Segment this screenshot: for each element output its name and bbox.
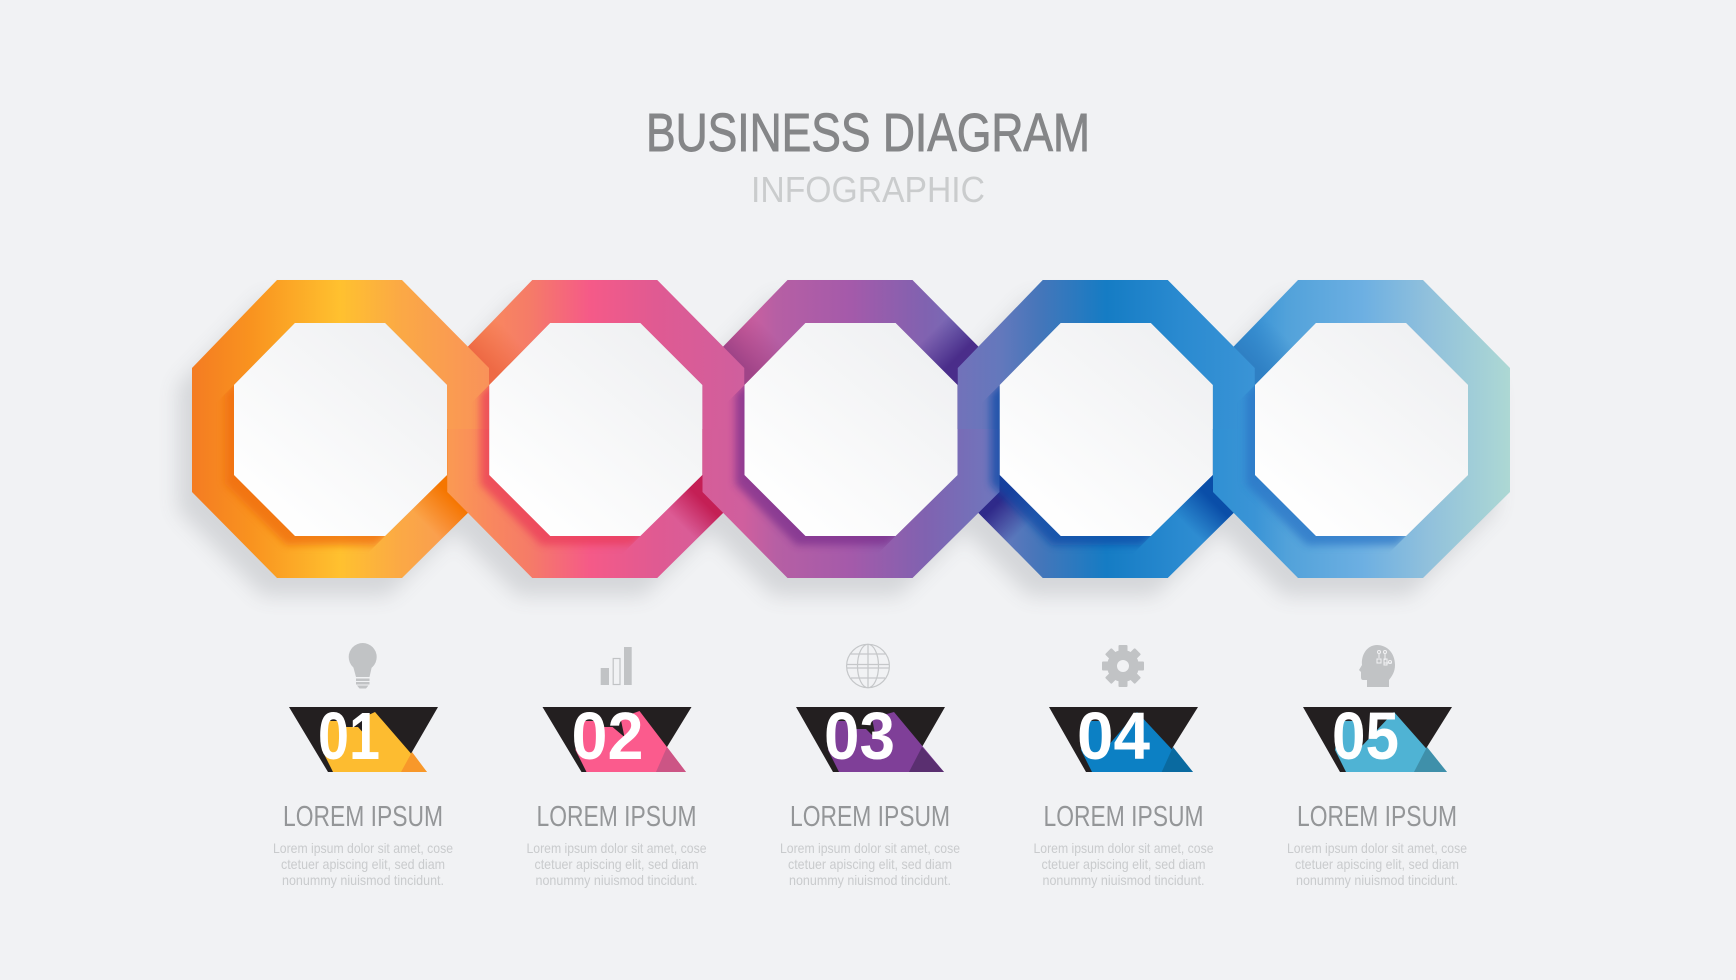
body text 4: nonummy niuismod tincidunt. [1042, 872, 1204, 888]
octagon chain diagram [178, 280, 1510, 596]
white octagon 3 [744, 323, 958, 536]
icon: light bulb [349, 643, 377, 688]
body text 1: Lorem ipsum dolor sit amet, cose [273, 840, 453, 856]
subtitle: INFOGRAPHIC [751, 169, 985, 210]
icon: bar chart [601, 647, 632, 685]
upper half of rings [192, 280, 1510, 430]
body text 2: nonummy niuismod tincidunt. [536, 872, 698, 888]
body text 3 [780, 840, 960, 888]
body text 5: ctetuer apiscing elit, sed diam [1295, 856, 1459, 872]
white octagon 1 [234, 323, 447, 536]
badge 02 [542, 699, 692, 774]
heading 2: LOREM IPSUM [536, 801, 696, 833]
body text 5 [1287, 840, 1467, 888]
body text 3: ctetuer apiscing elit, sed diam [788, 856, 952, 872]
column 4 [1034, 645, 1214, 888]
badge 05 [1303, 699, 1452, 774]
title: BUSINESS DIAGRAM [646, 103, 1090, 163]
badge 01 [289, 699, 438, 774]
body text 3: Lorem ipsum dolor sit amet, cose [780, 840, 960, 856]
lower half of rings [192, 429, 1510, 578]
drop shadow of the chain [178, 298, 1496, 596]
body text 5: Lorem ipsum dolor sit amet, cose [1287, 840, 1467, 856]
column 3 [780, 644, 960, 888]
badge 03 [796, 699, 945, 774]
badge 04: 04 [1077, 699, 1150, 774]
badge 03: 03 [824, 699, 895, 774]
body text 4: ctetuer apiscing elit, sed diam [1042, 856, 1206, 872]
icon: head with circuit [1359, 645, 1395, 687]
body text 2: ctetuer apiscing elit, sed diam [534, 856, 698, 872]
column 1 [273, 643, 453, 888]
inner shadows around the holes [224, 385, 1406, 549]
body text 1 [273, 840, 453, 888]
body text 3: nonummy niuismod tincidunt. [789, 872, 951, 888]
heading 5: LOREM IPSUM [1297, 801, 1457, 833]
body text 1: ctetuer apiscing elit, sed diam [281, 856, 445, 872]
badge 05: 05 [1332, 699, 1399, 774]
body text 5: nonummy niuismod tincidunt. [1296, 872, 1458, 888]
body text 1: nonummy niuismod tincidunt. [282, 872, 444, 888]
column 2 [526, 647, 707, 888]
icon: gear [1102, 645, 1144, 687]
body text 4: Lorem ipsum dolor sit amet, cose [1034, 840, 1214, 856]
icon: globe [847, 644, 889, 688]
badge 01: 01 [318, 699, 380, 774]
heading 3: LOREM IPSUM [790, 801, 950, 833]
white octagon 5 [1255, 323, 1468, 536]
heading 1: LOREM IPSUM [283, 801, 443, 833]
badge 04 [1049, 699, 1198, 774]
body text 2 [526, 840, 707, 888]
heading 4: LOREM IPSUM [1044, 801, 1204, 833]
body text 2: Lorem ipsum dolor sit amet, cose [526, 840, 707, 856]
badge 02: 02 [572, 699, 644, 774]
white octagon 2 [489, 323, 702, 536]
body text 4 [1034, 840, 1214, 888]
white octagon 4 [1000, 323, 1213, 536]
column 5 [1287, 645, 1467, 888]
